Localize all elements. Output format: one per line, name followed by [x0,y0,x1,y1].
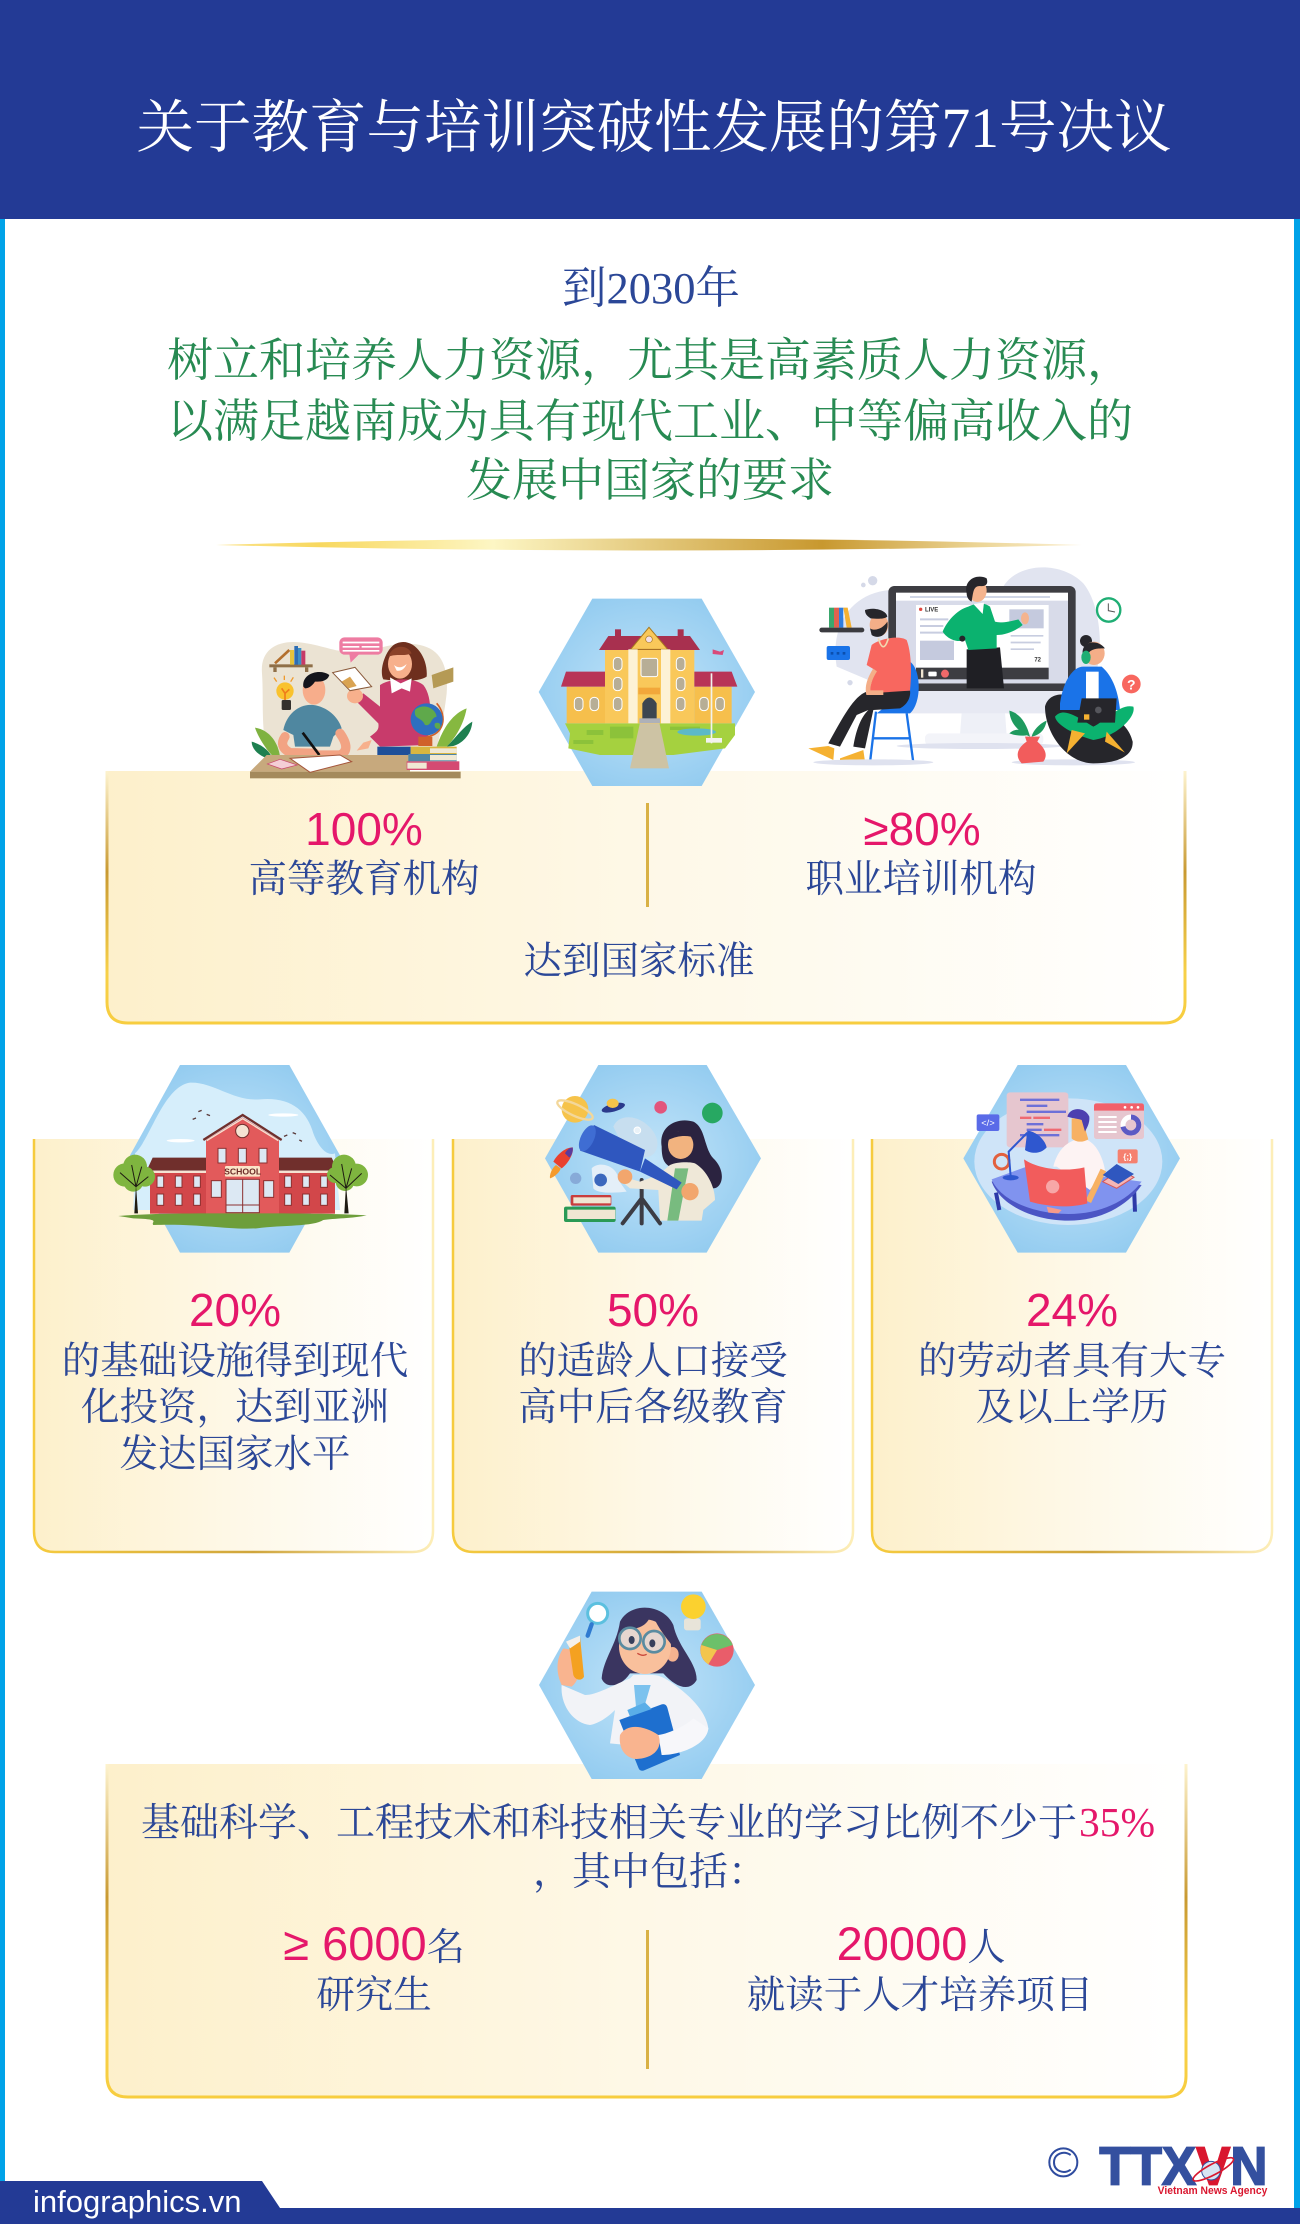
panel: post-secondary [452,1139,854,1553]
stat: vocational training: 职业培训机构 [805,858,1037,901]
stat: higher education: 100% [305,803,423,855]
page side border left [0,219,5,2181]
stat: 50% post-secondary: 高中后各级教育 [518,1386,788,1429]
goal statement: 树立和培养人力资源，尤其是高素质人力资源， [167,335,1133,386]
stat: higher education: 高等教育机构 [248,858,480,901]
stat: 24% workforce: 24% [1026,1284,1118,1336]
stat: postgraduates: ≥ 6000名 [283,1917,465,1970]
icon: online learning [808,567,1141,765]
icon: red school: SCHOOL [224,1167,262,1177]
stat: higher education [248,803,480,901]
icon: red school [113,1065,368,1253]
icon: online learning: 72 [1034,658,1042,664]
header band [0,0,1300,219]
goal statement: 以满足越南成为具有现代工业、中等偏高收入的 [167,396,1133,447]
science ratio text: 基础科学、工程技术和科技相关专业的学习比例不少于35% [141,1799,1155,1845]
stat: 24% workforce [918,1284,1226,1429]
icon: online learning: LIVE [925,608,938,614]
icon: girl with telescope [545,1065,761,1253]
goal statement [167,335,1133,506]
icon: programmer [963,1065,1180,1253]
stat divider [646,803,649,907]
stat: postgraduates: 研究生 [316,1974,432,2017]
stat: 50% post-secondary: 50% [607,1284,699,1336]
icon: university hexagon [539,599,755,786]
goal statement: 发展中国家的要求 [466,455,834,506]
stat: vocational training: ≥80% [863,803,981,855]
stat: 20% infrastructure [62,1284,408,1476]
footer website: infographics.vn [33,2184,242,2219]
stat: 20% infrastructure: 20% [189,1284,281,1336]
icon: online learning: ? [1127,676,1136,692]
agency name: Vietnam News Agency [1158,2185,1267,2197]
stat: talent program: 20000人 [837,1917,1005,1970]
globe emblem [1191,2154,1236,2185]
stat: 24% workforce: 及以上学历 [976,1387,1168,1429]
icon: programmer: </> [981,1118,995,1128]
panel: infrastructure [33,1139,434,1553]
stat: 24% workforce: 的劳动者具有大专 [918,1340,1226,1383]
icon: programmer: {;} [1123,1152,1132,1161]
stat divider [646,1930,649,2069]
national standard note: 达到国家标准 [523,940,755,983]
subtitle: year: 到2030年 [562,263,740,313]
footer bar [0,2181,1300,2224]
panel: national standards [106,771,1186,1024]
stat: talent program: 就读于人才培养项目 [747,1974,1093,2017]
science ratio text [141,1799,1155,1894]
stat: 50% post-secondary: 的适龄人口接受 [518,1340,788,1383]
panel: workforce [871,1139,1273,1553]
stat: talent program [747,1917,1093,2017]
stat: 20% infrastructure: 发达国家水平 [119,1433,351,1476]
icon: female scientist [539,1592,755,1779]
gold divider [216,538,1082,550]
stat: postgraduates [283,1917,465,2017]
stat: 20% infrastructure: 的基础设施得到现代 [62,1341,408,1383]
panel: science and technology [106,1764,1187,2098]
logo: TTXVN [1049,2137,1267,2197]
stat: vocational training [805,803,1037,901]
science ratio text: ，其中包括： [533,1851,767,1894]
stat: 50% post-secondary [518,1284,788,1429]
page side border right [1294,219,1300,2209]
wordmark: TTXVN [1099,2137,1267,2196]
title: 关于教育与培训突破性发展的第71号决议 [136,97,1172,160]
icon: teacher and student [250,637,472,778]
copyright mark [1049,2148,1077,2176]
stat: 20% infrastructure: 化投资，达到亚洲 [81,1386,389,1429]
